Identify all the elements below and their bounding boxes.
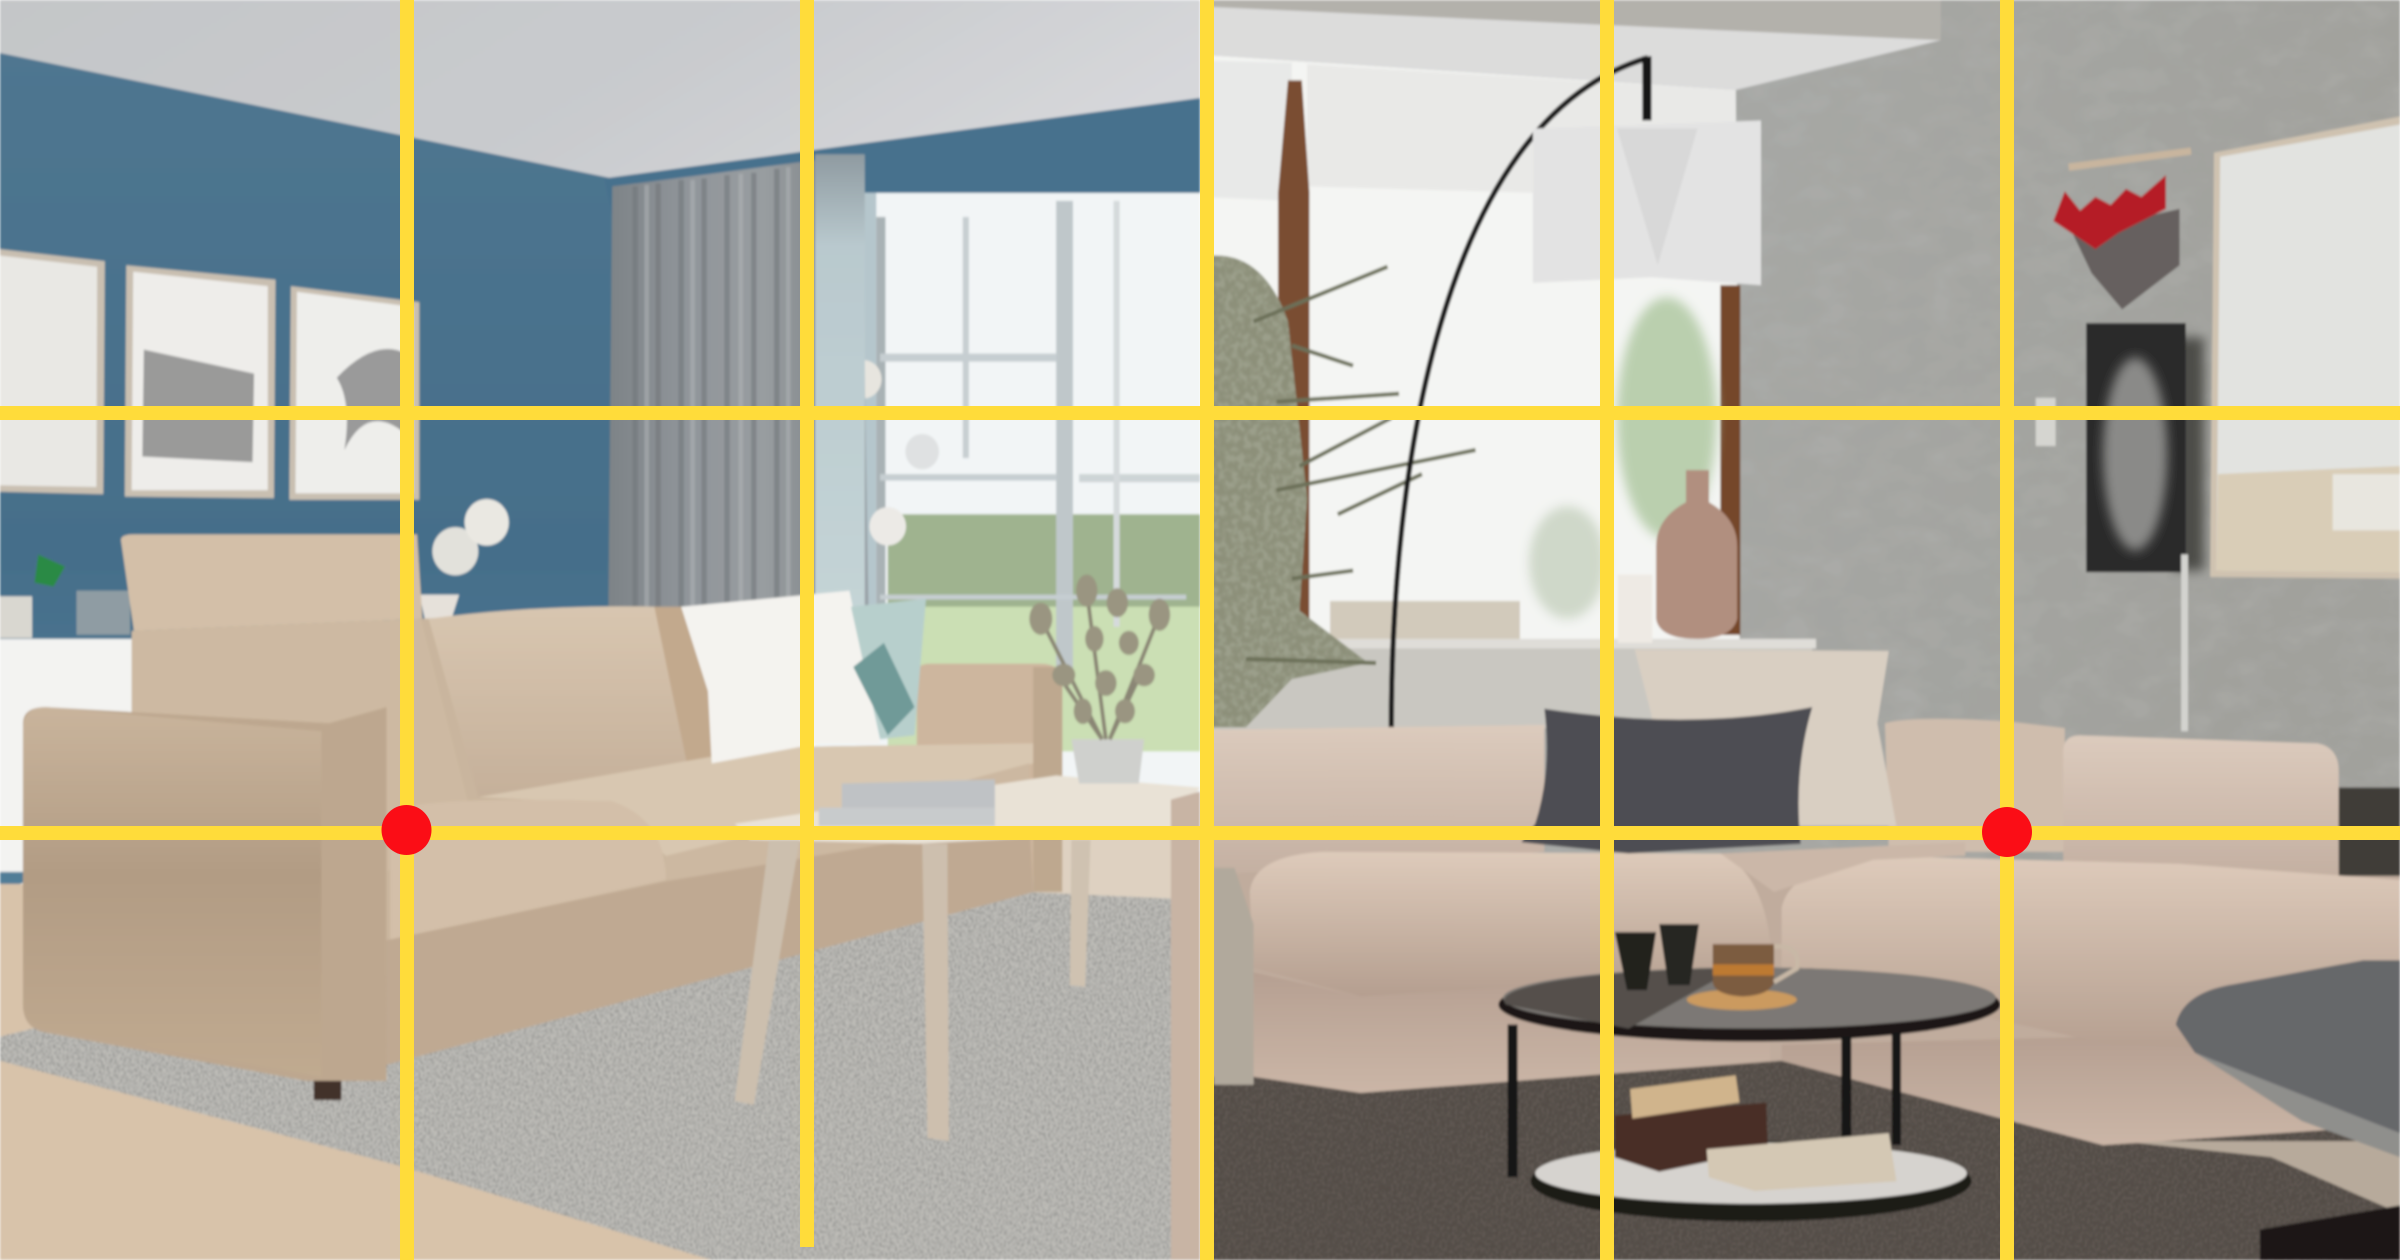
far armrest (916, 663, 1054, 746)
round black coffee table (1498, 968, 2001, 1221)
dark grey cushion (1521, 707, 1812, 853)
shaggy rug (0, 892, 1200, 1260)
ceiling (0, 0, 1200, 178)
back cushions (429, 604, 670, 691)
cups and teapot (1615, 924, 1797, 1010)
headrest (121, 534, 422, 631)
books and tray (1615, 1103, 1768, 1172)
left ottoman cushion (1250, 852, 1772, 996)
dried flowers in glass vase (1029, 575, 1170, 784)
sofa base (386, 820, 1033, 1065)
rug (1200, 1037, 2400, 1260)
arc floor lamp (1391, 56, 1761, 727)
photo: blue living room with beige sofa (0, 0, 1200, 1260)
horizontal grid lines (0, 406, 2400, 840)
window sill and low wall (1214, 648, 1812, 730)
white sideboard with plant (0, 554, 134, 872)
tufted grey ottoman (2176, 960, 2400, 1133)
beige corner sofa (1200, 719, 2400, 1145)
near armrest (23, 707, 386, 1081)
window (1200, 55, 1740, 643)
light switch and cable (2036, 398, 2188, 731)
lower shelf (1531, 1141, 1971, 1221)
cream cushion (1635, 649, 1896, 826)
back rest (1200, 725, 1544, 876)
floor (2118, 1141, 2400, 1213)
black speaker panel (2086, 323, 2204, 572)
framed pictures (0, 249, 419, 500)
red focal point: right sofa (1982, 807, 2032, 857)
olive tree (1200, 256, 1476, 727)
base of chaise (1254, 972, 1770, 1093)
terracotta vase and white candles (1618, 470, 1737, 643)
window wall header (609, 96, 1200, 194)
curtain (608, 154, 869, 612)
right photo sofa sliver (1171, 792, 1200, 1260)
window with garden view (815, 193, 1200, 836)
red focal point: left sofa (382, 805, 432, 855)
white cushion (680, 590, 854, 764)
sofa (23, 534, 1062, 1100)
coffee table with books (735, 775, 1200, 1141)
concrete wall (1537, 0, 2400, 862)
patterned cushion (851, 599, 926, 739)
ceramic jar (1214, 868, 1254, 1085)
ceiling beam (1200, 0, 1941, 90)
wall hanging (2053, 151, 2191, 309)
photo: grey concrete living room with arc lamp (1200, 0, 2400, 1260)
vertical grid lines (400, 0, 2014, 1260)
floor (0, 884, 765, 1260)
table lamp spheres (419, 499, 509, 619)
seat cushions (485, 743, 1034, 856)
blue wall (0, 53, 612, 892)
wall art canvas (2210, 117, 2400, 579)
right chaise cushion (1782, 856, 2400, 1053)
